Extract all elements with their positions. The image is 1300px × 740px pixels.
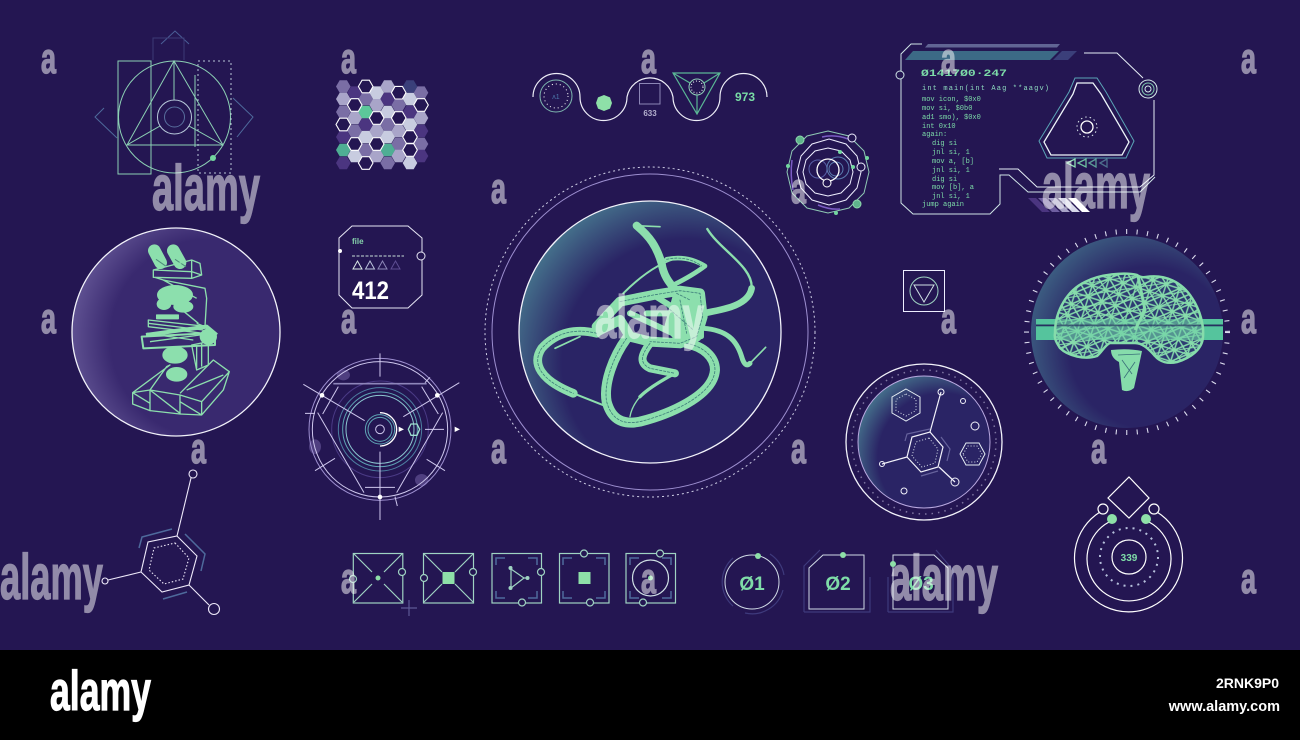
- badge 01: Ø1: [739, 574, 765, 595]
- panel: icon square frames: [350, 550, 676, 616]
- watermarks: a: [1241, 555, 1257, 603]
- panel: wave menu: [533, 73, 767, 120]
- watermarks: a: [1091, 425, 1107, 473]
- code listing: mov [b], a: [932, 184, 974, 192]
- watermarks: a: [941, 295, 957, 343]
- panel: hexagon grid: [336, 80, 428, 169]
- watermarks: a: [341, 555, 357, 603]
- code listing: ad1 smo), $0x0: [922, 114, 981, 122]
- code listing: mov si, $0b0: [922, 105, 972, 113]
- panel: file card: 412: [352, 277, 389, 305]
- icon: rounded triangle emblem: [1039, 78, 1134, 158]
- panel: file card: file: [352, 237, 364, 246]
- panel: microscope sphere: [72, 228, 280, 436]
- watermarks: alamy: [890, 542, 998, 614]
- code listing: dig si: [932, 176, 957, 184]
- watermarks: alamy: [1042, 150, 1150, 222]
- watermarks: a: [341, 35, 357, 83]
- brain wireframe: [1050, 270, 1210, 391]
- icon: sacred geometry triangle in circle: [95, 31, 253, 174]
- image id: 2RNK9P0: [1216, 675, 1279, 691]
- footer band: [0, 650, 1300, 740]
- badge 03: Ø3: [908, 574, 934, 595]
- code listing: Ø1417Ø0·247: [921, 68, 1007, 80]
- footer logo: alamy: [50, 659, 151, 722]
- panel: wave menu: 973: [735, 90, 755, 104]
- watermarks: alamy: [0, 541, 103, 613]
- watermarks: a: [641, 35, 657, 83]
- panel: file card: [338, 226, 425, 308]
- watermarks: [0, 35, 1257, 614]
- watermarks: alamy: [595, 284, 704, 351]
- watermarks: a: [941, 35, 957, 83]
- panel: molecule sphere: [846, 364, 1002, 520]
- code listing: [921, 68, 1049, 209]
- icon: ring device: [1074, 477, 1182, 612]
- panel: code terminal: [896, 44, 1157, 214]
- left-pointing triangles: [1067, 159, 1107, 167]
- code listing: again:: [922, 131, 947, 139]
- watermarks: a: [41, 295, 57, 343]
- code listing: dig si: [932, 140, 957, 148]
- watermarks: a: [41, 35, 57, 83]
- watermarks: a: [1241, 35, 1257, 83]
- watermarks: a: [491, 165, 507, 213]
- badge 03: [888, 550, 953, 612]
- icon: orbit rings: [786, 131, 869, 215]
- panel: wave menu: 633: [643, 109, 657, 118]
- watermarks: alamy: [152, 152, 260, 224]
- watermarks: a: [491, 425, 507, 473]
- watermarks: a: [641, 555, 657, 603]
- scan bar: [1036, 319, 1223, 340]
- watermarks: a: [791, 165, 807, 213]
- panel: target scope: [303, 353, 460, 520]
- microscope wireframe: [133, 251, 229, 415]
- icon: molecule: [102, 470, 220, 614]
- code listing: jnl si, 1: [932, 193, 970, 201]
- panel: central sphere with strand: [485, 167, 815, 497]
- icon: ring device: 339: [1121, 553, 1138, 564]
- badge 02: [804, 550, 870, 612]
- code listing: jump again: [922, 201, 964, 209]
- code listing: mov icon, $0x0: [922, 96, 981, 104]
- code listing: jnl si, 1: [932, 149, 970, 157]
- code listing: int 0x10: [922, 123, 956, 131]
- panel: brain sphere: [1026, 232, 1228, 432]
- code listing: mov a, [b]: [932, 158, 974, 166]
- watermarks: a: [191, 425, 207, 473]
- watermarks: a: [791, 425, 807, 473]
- code listing: int main(int Aag **aagv): [922, 85, 1049, 93]
- panel: wave menu: ᴧ1: [552, 94, 560, 101]
- watermarks: a: [341, 295, 357, 343]
- watermarks: a: [1241, 295, 1257, 343]
- icon: square triangle button: [904, 270, 944, 312]
- badge 01: [722, 553, 784, 614]
- slanted stripes: [1028, 198, 1090, 212]
- badge 02: Ø2: [825, 574, 851, 595]
- code listing: jnl si, 1: [932, 167, 970, 175]
- website: www.alamy.com: [1168, 699, 1280, 715]
- strand: [538, 226, 766, 423]
